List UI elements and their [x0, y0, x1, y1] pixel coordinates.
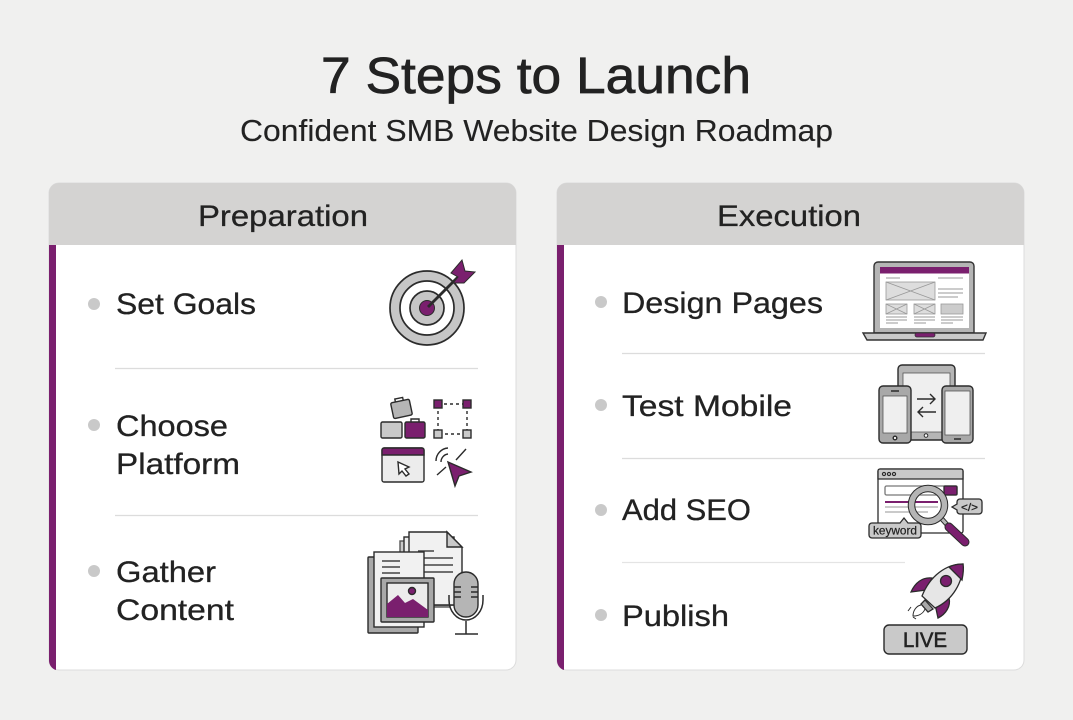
step: gather content [88, 556, 235, 627]
heading band: execution [557, 183, 1024, 245]
icon: responsive devices [879, 365, 973, 443]
heading: preparation: Preparation [198, 200, 368, 233]
panel accent bar: preparation [49, 245, 56, 670]
icon: laptop wireframe [863, 262, 986, 340]
step: gather content: Gather [116, 556, 216, 589]
icon: rocket and live button: LIVE [903, 629, 947, 652]
icon: platform options [381, 396, 471, 486]
title: 7 Steps to Launch [321, 47, 751, 104]
step: choose platform: Platform [116, 448, 240, 481]
icon: SEO magnifier: </> [961, 502, 978, 514]
icon: target with arrow [390, 260, 475, 345]
step: design pages: Design Pages [622, 287, 823, 320]
step: choose platform [88, 410, 240, 481]
step: test mobile: Test Mobile [622, 390, 792, 423]
step: gather content: Content [116, 594, 235, 627]
icon: SEO magnifier: keyword [873, 524, 917, 538]
step: set goals: Set Goals [116, 288, 256, 321]
heading band: preparation [49, 183, 516, 245]
step: choose platform: Choose [116, 410, 228, 443]
panel: execution [557, 183, 1024, 670]
icon: SEO magnifier [869, 469, 982, 542]
icon: rocket and live button [884, 564, 967, 654]
icon: content files, image and microphone [368, 532, 483, 634]
step: add seo: Add SEO [622, 494, 751, 527]
subtitle: Confident SMB Website Design Roadmap [240, 113, 833, 148]
heading: execution: Execution [717, 200, 861, 233]
panel: preparation [49, 183, 516, 670]
step: publish: Publish [622, 600, 729, 633]
panel accent bar: execution [557, 245, 564, 670]
